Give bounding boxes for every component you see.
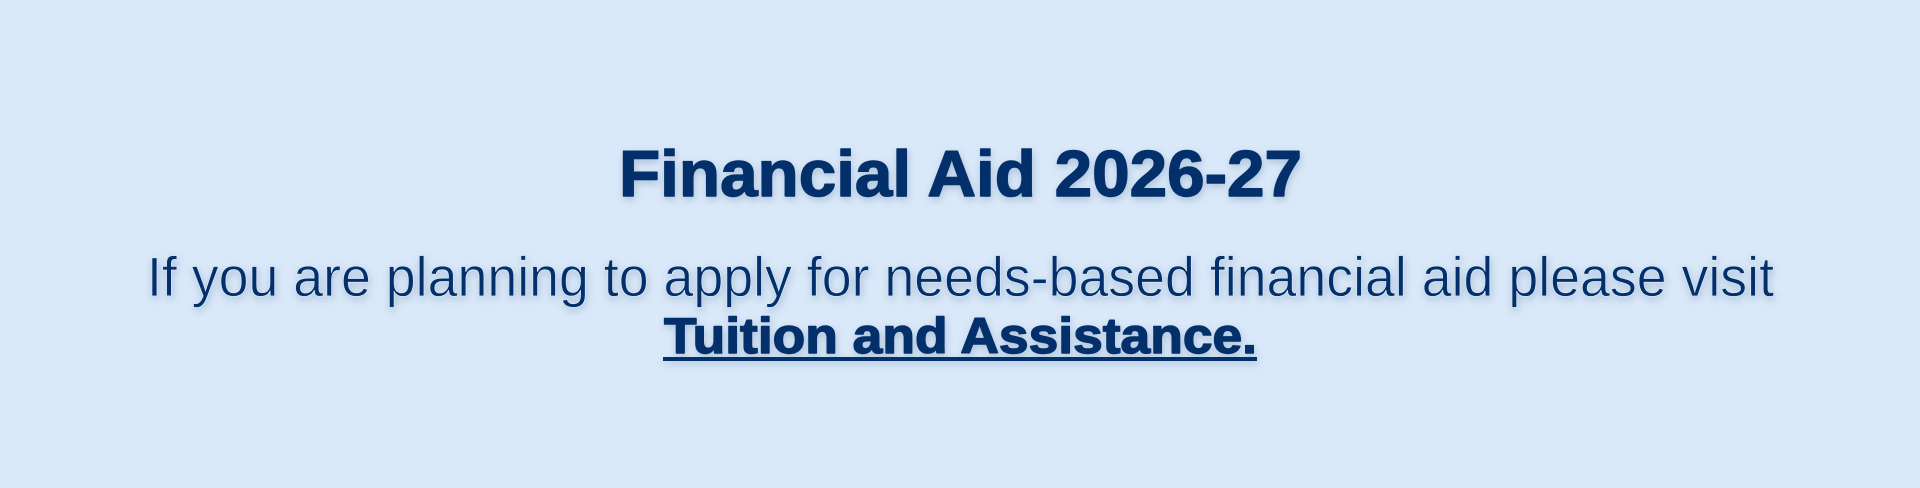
link: Tuition and Assistance: Tuition and Assistance. bbox=[664, 308, 1257, 364]
title: Financial Aid 2026-27 bbox=[619, 137, 1302, 210]
body text: financial aid instructions: If you are planning to apply for needs-based financial aid please visit bbox=[147, 245, 1774, 308]
